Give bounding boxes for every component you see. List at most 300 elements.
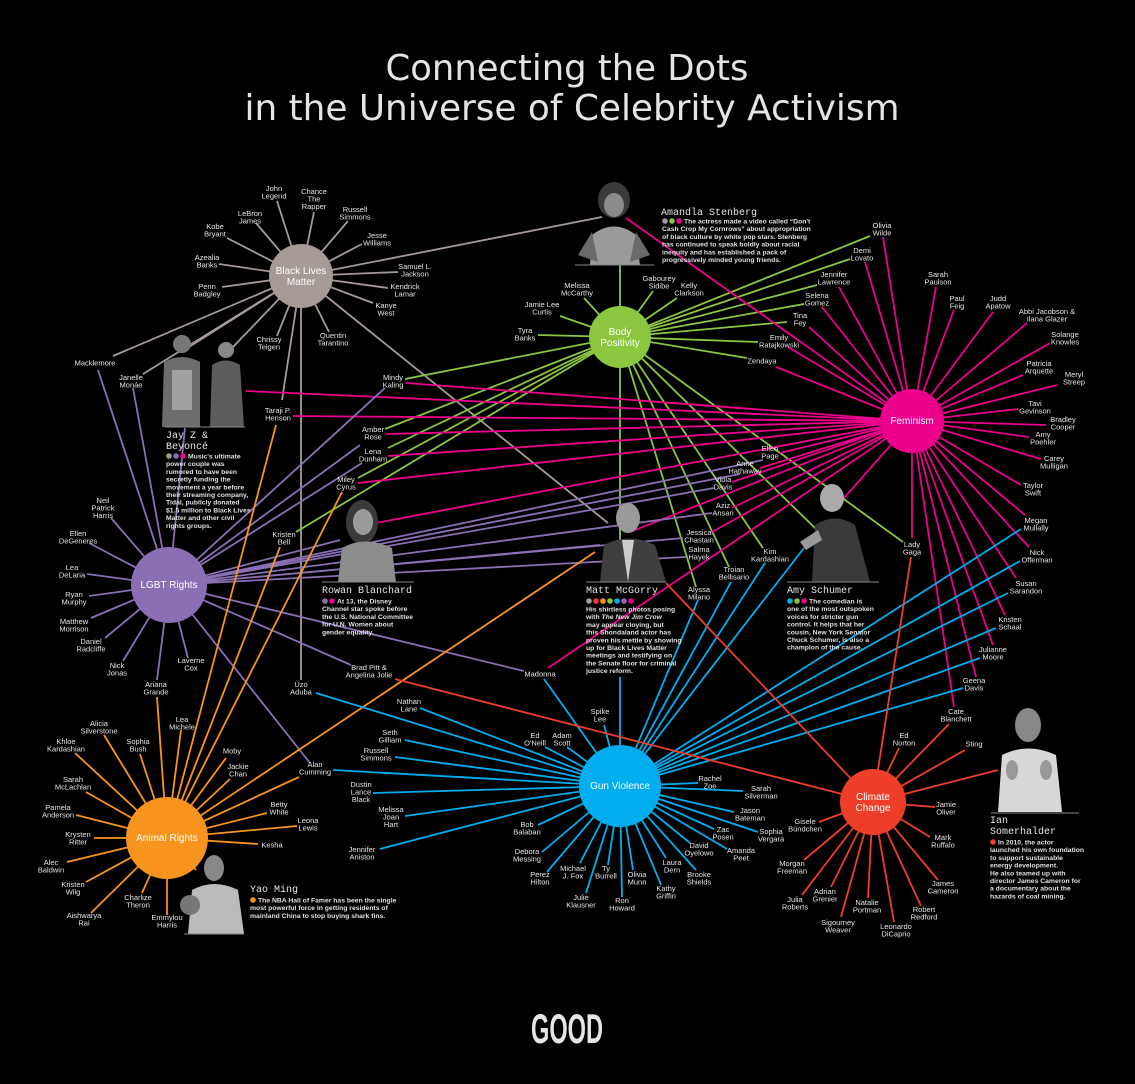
labels: black lives matter supporters: Macklemore bbox=[75, 358, 115, 368]
labels: black lives matter supporters: Henson bbox=[265, 413, 291, 422]
labels: body positivity supporters: Zendaya bbox=[747, 356, 777, 366]
labels: feminism supporters: Kristen bbox=[998, 615, 1022, 624]
hub: feminism bbox=[880, 389, 944, 453]
labels: multi-cause celebrities in middle: Kristen bbox=[272, 530, 296, 539]
labels: multi-cause celebrities in middle: Kim bbox=[764, 547, 776, 556]
labels: climate change supporters: Julia bbox=[787, 895, 804, 904]
labels: body positivity supporters: Kelly bbox=[681, 281, 697, 290]
callout: jay z and beyonce: rights groups. bbox=[166, 523, 212, 530]
labels: animal rights supporters: Krysten bbox=[65, 830, 91, 839]
labels: body positivity supporters: Gabourey bbox=[643, 274, 676, 283]
labels: multi-cause celebrities in middle: Bellisario bbox=[719, 572, 749, 581]
callout: matt mcgorry: justice reform. bbox=[585, 668, 633, 675]
labels: lgbt rights supporters: Daniel bbox=[80, 637, 102, 646]
labels: gun violence supporters: Balaban bbox=[513, 827, 541, 836]
labels: black lives matter supporters: The bbox=[308, 194, 320, 204]
labels: multi-cause celebrities in middle: Chastain bbox=[684, 535, 714, 544]
labels: multi-cause celebrities in middle: Amber bbox=[362, 425, 385, 434]
hub: body positivity: Body bbox=[609, 327, 631, 338]
labels: body positivity supporters: Ratajkowski bbox=[759, 340, 799, 349]
callout: rowan blanchard: Channel star spoke before bbox=[322, 606, 408, 613]
photo: amy schumer bbox=[787, 484, 879, 582]
callout: rowan blanchard: for U.N. Women about bbox=[322, 622, 394, 629]
labels: gun violence supporters: Perez bbox=[530, 870, 550, 879]
labels: black lives matter supporters: Jackson bbox=[401, 269, 429, 278]
labels: body positivity supporters: Selena bbox=[805, 291, 830, 300]
callout: amandla stenberg: progressively minded young friends. bbox=[662, 257, 781, 264]
labels: multi-cause celebrities in middle: Troian bbox=[724, 565, 744, 574]
callout: jay z and beyonce: Tidal, publicly donated bbox=[166, 500, 240, 507]
labels: gun violence supporters: Michael bbox=[560, 864, 586, 873]
labels: climate change supporters: Weaver bbox=[825, 925, 851, 934]
labels: animal rights supporters: Michele bbox=[169, 722, 195, 731]
labels: animal rights supporters: Theron bbox=[126, 900, 150, 909]
callout: matt mcgorry: with The New Jim Crow bbox=[585, 614, 663, 621]
labels: lgbt rights supporters: Morrison bbox=[59, 624, 89, 633]
logo: GOOD: GOOD bbox=[531, 1005, 603, 1052]
labels: gun violence supporters: Simmons bbox=[360, 753, 392, 762]
labels: lgbt rights supporters: Angelina Jolie bbox=[346, 670, 392, 679]
labels: lgbt rights supporters: Lea bbox=[66, 563, 79, 572]
labels: multi-cause celebrities in middle: Jessica bbox=[686, 528, 712, 537]
labels: climate change supporters: Jamie bbox=[936, 800, 956, 809]
callout: ian somerhalder: energy development. bbox=[990, 863, 1058, 870]
labels: gun violence supporters: Lane bbox=[401, 704, 417, 713]
labels: feminism supporters: Schaal bbox=[999, 622, 1022, 631]
labels: feminism supporters: Judd bbox=[990, 294, 1006, 303]
labels: lgbt rights supporters: Alan bbox=[307, 760, 323, 769]
labels: gun violence supporters: Howard bbox=[609, 903, 635, 912]
labels: multi-cause celebrities in middle: Lena bbox=[365, 447, 382, 456]
labels: black lives matter supporters: LeBron bbox=[238, 209, 262, 218]
labels: gun violence supporters: Nathan bbox=[397, 697, 421, 706]
labels: multi-cause celebrities in middle: Anne bbox=[736, 459, 754, 468]
callout: jay z and beyonce bbox=[166, 431, 251, 530]
callout: ian somerhalder: hazards of coal mining. bbox=[990, 893, 1066, 900]
callout: rowan blanchard: the U.S. National Committee bbox=[322, 614, 413, 621]
labels: multi-cause celebrities in middle: Cyrus bbox=[336, 482, 356, 491]
labels: gun violence supporters: Vergara bbox=[758, 834, 785, 843]
labels: body positivity supporters: Emily bbox=[770, 333, 788, 342]
labels: lgbt rights supporters: Jonas bbox=[107, 668, 127, 677]
labels: animal rights supporters: Moby bbox=[223, 746, 241, 756]
labels: animal rights supporters: Chan bbox=[229, 769, 247, 778]
labels: climate change supporters: Redford bbox=[911, 912, 937, 921]
callout: ian somerhalder bbox=[990, 816, 1084, 900]
callout: matt mcgorry: proven his mettle by showing bbox=[586, 637, 682, 644]
labels: gun violence supporters: Aniston bbox=[349, 852, 375, 861]
labels: animal rights supporters: Leona bbox=[298, 816, 319, 825]
labels: animal rights supporters: Ritter bbox=[69, 837, 87, 846]
callout: matt mcgorry: Matt McGorry bbox=[586, 586, 658, 597]
labels: feminism supporters: Streep bbox=[1063, 377, 1085, 386]
labels: gun violence supporters: O'Neill bbox=[524, 738, 546, 747]
callout: matt mcgorry: meetings and testifying on bbox=[586, 653, 672, 660]
labels: gun violence supporters: Peet bbox=[733, 853, 750, 862]
callout: amy schumer: voices for stricter gun bbox=[787, 614, 858, 621]
callout: jay z and beyonce: Jay Z & bbox=[166, 431, 208, 442]
labels: gun violence supporters: Russell bbox=[364, 746, 389, 755]
labels: gun violence supporters: Bateman bbox=[735, 813, 765, 822]
labels: lgbt rights supporters: Ryan bbox=[65, 590, 83, 599]
labels: lgbt rights supporters: Ellen bbox=[70, 529, 86, 538]
labels: black lives matter supporters: Tarantino bbox=[318, 338, 348, 347]
labels: gun violence supporters: Amanda bbox=[727, 846, 756, 855]
labels: gun violence supporters: Seth bbox=[382, 728, 398, 737]
labels: animal rights supporters: Khloe bbox=[56, 737, 76, 746]
labels: animal rights supporters: Lewis bbox=[298, 823, 318, 832]
labels: feminism supporters: Mulligan bbox=[1040, 461, 1068, 470]
labels: climate change supporters: Gisele bbox=[794, 817, 816, 826]
labels: black lives matter supporters: Rapper bbox=[302, 202, 327, 211]
callout: ian somerhalder: In 2010, the actor bbox=[998, 840, 1054, 846]
labels: gun violence supporters: Ty bbox=[602, 864, 610, 873]
labels: gun violence supporters: Lee bbox=[594, 714, 606, 723]
title: in the Universe of Celebrity Activism bbox=[244, 88, 900, 129]
labels: black lives matter supporters: Azealia bbox=[195, 253, 220, 262]
labels: climate change supporters: Roberts bbox=[782, 902, 808, 911]
callout: rowan blanchard bbox=[322, 585, 413, 636]
hub: animal rights bbox=[126, 797, 208, 879]
labels: body positivity supporters bbox=[515, 221, 892, 366]
labels: feminism supporters: Apatow bbox=[985, 301, 1011, 310]
labels: gun violence supporters: David bbox=[689, 841, 709, 850]
labels: multi-cause celebrities in middle: Viola bbox=[715, 475, 732, 484]
labels: lgbt rights supporters: Cumming bbox=[299, 767, 331, 776]
labels: gun violence supporters: Olivia bbox=[628, 870, 647, 879]
labels: black lives matter supporters: Penn bbox=[198, 282, 216, 291]
photo: amandla stenberg bbox=[575, 182, 654, 265]
labels: black lives matter supporters: Kanye bbox=[375, 301, 397, 310]
labels: gun violence supporters: Burrell bbox=[595, 871, 617, 880]
lines: climate change bbox=[395, 557, 998, 922]
callout: amy schumer: champion of the cause. bbox=[787, 645, 863, 652]
callout: ian somerhalder: director James Cameron for bbox=[990, 878, 1081, 885]
labels: gun violence supporters: Joan bbox=[383, 812, 399, 822]
labels: gun violence supporters: Jennifer bbox=[349, 845, 376, 854]
labels: black lives matter supporters: Chance bbox=[301, 187, 327, 196]
lines: body positivity bbox=[296, 236, 903, 587]
labels: black lives matter supporters: West bbox=[378, 308, 395, 317]
callout: matt mcgorry bbox=[585, 586, 682, 675]
callout: amy schumer: The comedian is bbox=[809, 598, 862, 606]
labels: gun violence supporters: Gilliam bbox=[379, 735, 401, 744]
callout: yao ming: mainland China to stop buying shark fins. bbox=[250, 913, 385, 920]
labels: feminism supporters bbox=[903, 270, 1085, 723]
photo: ian somerhalder bbox=[991, 708, 1079, 813]
labels: climate change supporters: James bbox=[932, 879, 954, 888]
labels: climate change supporters: Sting bbox=[965, 740, 983, 748]
callout: matt mcgorry: may appear cloying, but bbox=[586, 622, 665, 629]
labels: lgbt rights supporters: Patrick bbox=[92, 504, 115, 512]
labels: body positivity supporters: Demi bbox=[853, 246, 871, 255]
labels: animal rights supporters: Wiig bbox=[66, 887, 80, 896]
labels: lgbt rights supporters: DeLaria bbox=[59, 570, 86, 579]
labels: feminism supporters: Swift bbox=[1025, 488, 1042, 497]
labels: animal rights supporters: Kardashian bbox=[47, 744, 85, 753]
callout: yao ming: Yao Ming bbox=[250, 884, 298, 896]
labels: gun violence supporters: Dustin bbox=[350, 780, 372, 789]
labels: animal rights supporters: Baldwin bbox=[38, 865, 64, 874]
hub: climate change: Change bbox=[855, 803, 891, 814]
hub: black lives matter bbox=[269, 244, 333, 308]
hub: lgbt rights bbox=[131, 547, 207, 623]
labels: feminism supporters: Moore bbox=[982, 652, 1004, 661]
labels: black lives matter supporters: Lamar bbox=[394, 289, 416, 298]
callout: jay z and beyonce: movement a year before bbox=[166, 484, 244, 491]
callout: matt mcgorry: His shirtless photos posing bbox=[586, 606, 675, 614]
labels: climate change supporters: Grenier bbox=[812, 894, 838, 903]
labels: lgbt rights supporters: Brad Pitt & bbox=[351, 663, 387, 672]
labels: feminism supporters: Abbi Jacobson & bbox=[1019, 307, 1075, 316]
labels: climate change supporters: Freeman bbox=[777, 866, 807, 875]
labels: gun violence supporters: Griffin bbox=[656, 891, 676, 900]
labels: feminism supporters: Sarandon bbox=[1010, 586, 1042, 595]
labels: black lives matter supporters: Kendrick bbox=[390, 282, 420, 291]
labels: multi-cause celebrities in middle: Salma bbox=[688, 545, 710, 554]
labels: body positivity supporters: Olivia bbox=[873, 221, 892, 230]
labels: animal rights supporters: Sophia bbox=[126, 737, 151, 746]
callout: amandla stenberg: inequity and has established a pack of bbox=[662, 249, 787, 256]
labels: black lives matter supporters: Kobe bbox=[206, 222, 224, 231]
labels: body positivity supporters: Tina bbox=[793, 311, 808, 320]
labels: climate change supporters: Sigourney bbox=[821, 918, 855, 927]
callout: ian somerhalder: Somerhalder bbox=[990, 826, 1056, 838]
lines: black lives matter bbox=[113, 201, 608, 680]
labels: body positivity supporters: Jennifer bbox=[821, 270, 848, 279]
labels: body positivity supporters: Banks bbox=[515, 333, 536, 342]
labels: feminism supporters: Davis bbox=[965, 683, 984, 692]
callout: yao ming: The NBA Hall of Famer has been the single bbox=[258, 898, 397, 904]
labels: animal rights supporters: Sarah bbox=[63, 775, 83, 784]
lines: animal rights bbox=[67, 425, 595, 915]
callout: yao ming: most powerful force in getting residents of bbox=[250, 905, 389, 912]
labels: feminism supporters: Paulson bbox=[924, 277, 952, 286]
hub: gun violence bbox=[579, 745, 661, 827]
hub: lgbt rights: LGBT Rights bbox=[140, 580, 198, 591]
labels: lgbt rights supporters: Grande bbox=[143, 687, 169, 696]
labels: gun violence supporters bbox=[349, 697, 785, 912]
labels: feminism supporters: Arquette bbox=[1025, 366, 1053, 375]
labels: black lives matter supporters: Russell bbox=[343, 205, 368, 214]
callout: jay z and beyonce: secretly funding the bbox=[166, 477, 231, 484]
hub: climate change bbox=[840, 769, 906, 835]
labels: multi-cause celebrities in middle: Mindy bbox=[383, 373, 403, 382]
labels: animal rights supporters: White bbox=[269, 807, 289, 816]
labels: gun violence supporters: Julie bbox=[573, 893, 589, 902]
labels: climate change supporters: Mark bbox=[935, 833, 952, 842]
callout: matt mcgorry: this Shondaland actor has bbox=[586, 630, 671, 637]
labels: multi-cause celebrities in middle: Kardashian bbox=[751, 554, 789, 563]
labels: climate change supporters: Natalie bbox=[855, 898, 879, 907]
labels: lgbt rights supporters bbox=[59, 496, 556, 776]
lines: feminism bbox=[246, 218, 1057, 707]
labels: body positivity supporters: McCarthy bbox=[561, 288, 593, 297]
labels: multi-cause celebrities in middle: Milano bbox=[688, 592, 710, 601]
labels: climate change supporters bbox=[777, 731, 983, 938]
labels: body positivity supporters: Sidibe bbox=[649, 281, 669, 290]
callout: jay z and beyonce: Matter and other civil bbox=[166, 515, 234, 522]
labels: gun violence supporters: Debora bbox=[515, 847, 540, 856]
labels: multi-cause celebrities in middle: Dunham bbox=[359, 454, 387, 463]
labels: multi-cause celebrities in middle: Miley bbox=[337, 475, 355, 484]
labels: feminism supporters: Knowles bbox=[1051, 337, 1079, 346]
labels: feminism supporters: Bradley bbox=[1050, 415, 1076, 424]
photo: matt mcgorry bbox=[586, 503, 666, 582]
hub: body positivity bbox=[589, 306, 651, 368]
labels: animal rights supporters bbox=[38, 715, 319, 929]
labels: black lives matter supporters: James bbox=[239, 216, 261, 225]
hub: body positivity: Positivity bbox=[600, 338, 640, 349]
labels: body positivity supporters: Gomez bbox=[805, 298, 829, 307]
labels: black lives matter supporters: Williams bbox=[363, 238, 391, 247]
labels: feminism supporters: Lady bbox=[904, 540, 920, 549]
labels: animal rights supporters: Pamela bbox=[45, 803, 72, 812]
labels: black lives matter supporters: Bryant bbox=[204, 229, 227, 238]
labels: lgbt rights supporters: Nick bbox=[110, 661, 125, 670]
labels: feminism supporters: Mullally bbox=[1023, 523, 1049, 532]
labels: gun violence supporters: Sarah bbox=[751, 784, 771, 793]
labels: black lives matter supporters: Legend bbox=[261, 191, 287, 200]
labels: animal rights supporters: Alicia bbox=[90, 719, 109, 728]
labels: climate change supporters: Adrian bbox=[814, 887, 836, 896]
labels: black lives matter supporters: Taraji P. bbox=[265, 406, 291, 415]
labels: gun violence supporters: Laura bbox=[662, 858, 682, 867]
labels: feminism supporters: Paul bbox=[949, 294, 965, 303]
callout: jay z and beyonce: power couple was bbox=[166, 461, 225, 468]
labels: multi-cause celebrities in middle: Davis bbox=[714, 482, 733, 491]
labels: gun violence supporters: Adam bbox=[552, 731, 572, 740]
callout: jay z and beyonce: rumored to have been bbox=[166, 469, 237, 476]
labels: multi-cause celebrities in middle: Bell bbox=[278, 537, 291, 546]
labels: climate change supporters: Morgan bbox=[779, 859, 805, 868]
labels: lgbt rights supporters: Neil bbox=[97, 496, 110, 505]
labels: feminism supporters: Blanchett bbox=[940, 714, 973, 723]
labels: black lives matter supporters: Badgley bbox=[193, 289, 221, 298]
callout: jay z and beyonce: their streaming company, bbox=[166, 492, 248, 499]
callout: jay z and beyonce: $1.5 million to Black Lives bbox=[166, 507, 251, 514]
labels: gun violence supporters: Jason bbox=[740, 806, 760, 815]
labels: feminism supporters: Julianne bbox=[979, 645, 1007, 654]
labels: gun violence supporters: Zoe bbox=[704, 781, 716, 790]
labels: feminism supporters: Patricia bbox=[1026, 359, 1052, 368]
labels: animal rights supporters: Lea bbox=[176, 715, 189, 724]
labels: multi-cause celebrities in middle: Hayek bbox=[688, 552, 710, 561]
callout: ian somerhalder: Ian bbox=[990, 816, 1008, 827]
labels: gun violence supporters: Hilton bbox=[530, 877, 550, 886]
labels: black lives matter supporters: Uzo bbox=[294, 680, 308, 689]
labels: multi-cause celebrities in middle: Rose bbox=[364, 432, 382, 441]
labels: black lives matter supporters: Monáe bbox=[120, 380, 142, 389]
labels: animal rights supporters: Betty bbox=[270, 800, 288, 809]
labels: gun violence supporters: Posen bbox=[712, 832, 734, 841]
labels: climate change supporters: Portman bbox=[853, 905, 881, 914]
labels: gun violence supporters: Ron bbox=[615, 896, 629, 905]
callout: ian somerhalder: launched his own foundation bbox=[990, 847, 1084, 854]
labels: animal rights supporters: Kesha bbox=[261, 840, 283, 850]
labels: animal rights supporters: Anderson bbox=[42, 810, 74, 819]
labels: feminism supporters: Cooper bbox=[1051, 422, 1076, 431]
callout: amy schumer: Amy Schumer bbox=[787, 585, 853, 597]
labels: black lives matter supporters: Aduba bbox=[290, 687, 313, 696]
labels: lgbt rights supporters: Harris bbox=[93, 511, 113, 520]
labels: black lives matter supporters: Teigen bbox=[258, 342, 280, 351]
labels: feminism supporters: Gaga bbox=[903, 547, 922, 556]
labels: feminism supporters: Ilana Glazer bbox=[1027, 314, 1068, 323]
labels: body positivity supporters: Clarkson bbox=[674, 288, 704, 297]
labels: multi-cause celebrities in middle: Kaling bbox=[383, 380, 403, 389]
labels: black lives matter supporters: Chrissy bbox=[256, 335, 282, 344]
labels: animal rights supporters: Charlize bbox=[124, 893, 152, 902]
labels: lgbt rights supporters: DeGeneres bbox=[59, 536, 97, 545]
callout: rowan blanchard: At 13, the Disney bbox=[337, 598, 392, 606]
labels: lgbt rights supporters: Radcliffe bbox=[76, 644, 106, 653]
labels: climate change supporters: Bündchen bbox=[788, 824, 822, 833]
labels: climate change supporters: Ruffalo bbox=[931, 840, 955, 849]
labels: feminism supporters: Feig bbox=[950, 301, 964, 310]
callout: jay z and beyonce: Beyoncé bbox=[166, 441, 208, 453]
lines: gun violence bbox=[316, 529, 1021, 897]
title bbox=[244, 48, 900, 129]
labels: lgbt rights supporters: Cox bbox=[184, 663, 198, 672]
labels: feminism supporters: Susan bbox=[1015, 579, 1037, 588]
hub: animal rights: Animal Rights bbox=[136, 833, 198, 844]
labels: body positivity supporters: Melissa bbox=[564, 281, 591, 290]
labels: multi-cause celebrities in middle: Ansari bbox=[712, 508, 734, 517]
callout: matt mcgorry: up for Black Lives Matter bbox=[586, 645, 667, 652]
labels: feminism supporters: Cate bbox=[948, 707, 964, 716]
labels: body positivity supporters: Curtis bbox=[532, 307, 552, 316]
labels: gun violence supporters: Messing bbox=[513, 854, 541, 863]
labels: body positivity supporters: Tyra bbox=[518, 326, 533, 335]
title: Connecting the Dots bbox=[386, 48, 748, 89]
callout: rowan blanchard: gender equality. bbox=[322, 629, 374, 636]
labels: gun violence supporters: Sophia bbox=[759, 827, 784, 836]
hub: black lives matter: Black Lives bbox=[276, 266, 326, 277]
labels: animal rights supporters: Aishwarya bbox=[67, 911, 102, 920]
callout: amandla stenberg: The actress made a video called “Don't bbox=[684, 218, 811, 226]
labels: animal rights supporters: Jackie bbox=[227, 762, 249, 771]
lines: lgbt rights bbox=[87, 370, 763, 763]
callout: amandla stenberg: has continued to speak boldly about racial bbox=[662, 242, 800, 249]
labels: black lives matter supporters: Janelle bbox=[119, 373, 143, 382]
labels: feminism supporters: Carey bbox=[1044, 454, 1064, 463]
labels: feminism supporters: Amy bbox=[1036, 430, 1051, 439]
labels: feminism supporters: Solange bbox=[1051, 330, 1079, 339]
labels: feminism supporters: Megan bbox=[1025, 516, 1047, 525]
labels: climate change supporters: DiCaprio bbox=[881, 929, 911, 938]
hub: feminism: Feminism bbox=[890, 416, 934, 427]
labels: gun violence supporters: Kathy bbox=[656, 884, 676, 893]
labels: black lives matter supporters: Jesse bbox=[367, 231, 387, 240]
callout: amandla stenberg: of black culture by white pop stars. Stenberg bbox=[662, 234, 807, 241]
callout: yao ming bbox=[250, 884, 397, 920]
labels: feminism supporters: Tavi bbox=[1028, 399, 1042, 408]
labels: climate change supporters: Oliver bbox=[936, 807, 956, 816]
labels: body positivity supporters: Lawrence bbox=[818, 277, 850, 286]
callout: matt mcgorry: the Senate floor for criminal bbox=[586, 660, 676, 667]
labels: animal rights supporters: Rai bbox=[78, 918, 90, 927]
labels: gun violence supporters: Melissa bbox=[378, 805, 405, 814]
labels: gun violence supporters: Lance bbox=[351, 788, 371, 796]
labels: animal rights supporters: Emmylou bbox=[151, 913, 183, 922]
labels: gun violence supporters: Shields bbox=[687, 877, 712, 886]
labels: climate change supporters: Robert bbox=[913, 905, 936, 914]
callout: amy schumer: Chuck Schumer, is also a bbox=[787, 637, 869, 644]
callout: amandla stenberg: Amandla Stenberg bbox=[661, 207, 757, 219]
hub: climate change: Climate bbox=[856, 792, 890, 803]
labels: gun violence supporters: Hart bbox=[384, 820, 399, 829]
